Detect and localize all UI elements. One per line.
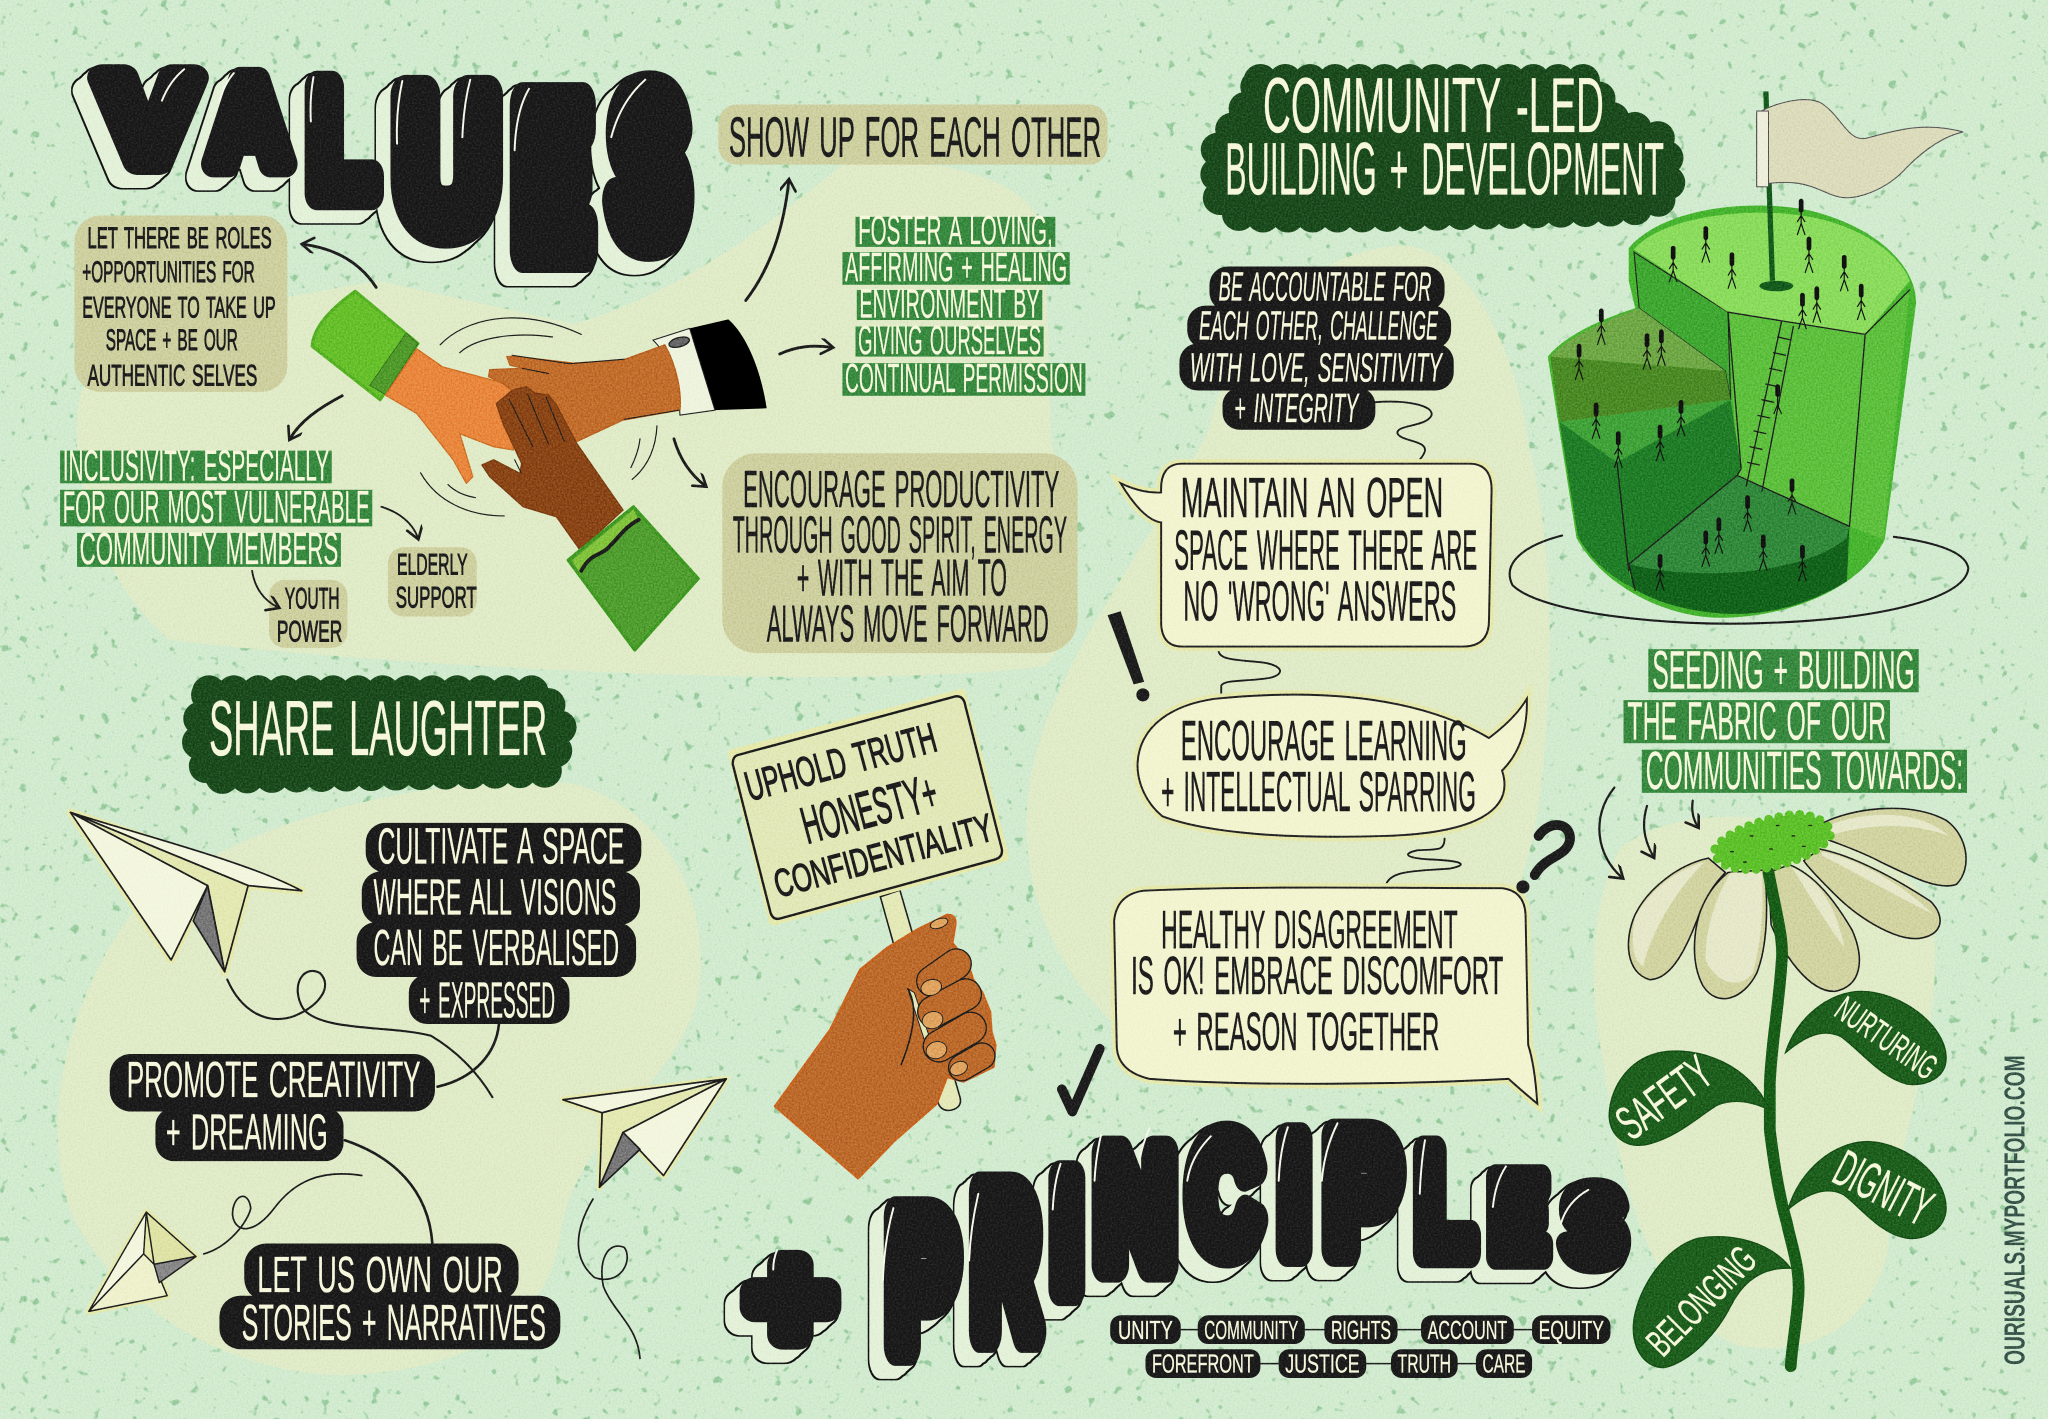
- sign handle: [880, 890, 960, 1110]
- connector lines between pills and plane trails: [204, 971, 640, 1358]
- icon: brown hand: [488, 345, 680, 441]
- title: VALUES: E: [515, 59, 590, 295]
- icon: paper plane top left: [71, 812, 302, 972]
- stem: [1768, 873, 1799, 1366]
- sign with hand: [733, 694, 1004, 1178]
- text: EACH OTHER, CHALLENGE: [1199, 303, 1438, 349]
- icon: fist: [775, 915, 1000, 1178]
- text: SPACE WHERE THERE ARE: [1174, 518, 1477, 581]
- black pills: cultivate a space: [357, 817, 641, 1028]
- black pills: promote creativity: + DREAMING: [166, 1103, 328, 1160]
- icon: light orange hand: [385, 349, 517, 483]
- structure lines: [1617, 290, 1910, 590]
- tags: principles keywords: [1110, 1315, 1610, 1379]
- title: + PRINCIPLES: +: [749, 1222, 832, 1375]
- text: ALWAYS MOVE FORWARD: [767, 595, 1049, 653]
- black pills: let us own our stories: [219, 1243, 560, 1351]
- leaf: nurturing: [1785, 989, 1946, 1087]
- sign board: CONFIDENTIALITY: [769, 807, 998, 906]
- title: VALUES: A: [210, 55, 289, 191]
- tag: elderly support: ELDERLY: [397, 549, 468, 582]
- speech bubble: healthy disagreement: HEALTHY DISAGREEMENT: [1161, 901, 1458, 960]
- text: + INTELLECTUAL SPARRING: [1161, 760, 1476, 823]
- panel: inclusivity: [60, 443, 372, 574]
- upper wall: [1634, 252, 1731, 400]
- title: + PRINCIPLES: I: [1280, 1106, 1308, 1284]
- arrows around hands: [252, 180, 832, 607]
- black pills: let us own our stories: LET US OWN OUR: [257, 1246, 503, 1303]
- text: NO 'WRONG' ANSWERS: [1183, 569, 1456, 632]
- title: + PRINCIPLES: P: [1326, 1102, 1399, 1284]
- title: + PRINCIPLES: R: [973, 1151, 1038, 1373]
- panel: foster a loving environment: FOSTER A LOVING,: [858, 207, 1053, 253]
- panel: let there be roles: LET THERE BE ROLES: [88, 222, 272, 255]
- panel: let there be roles: [74, 216, 287, 392]
- title: + PRINCIPLES: S: [1563, 1168, 1625, 1284]
- panel: inclusivity: INCLUSIVITY: ESPECIALLY: [63, 443, 329, 491]
- panel: let there be roles: SPACE + BE OUR: [106, 324, 238, 357]
- sign board: UPHOLD TRUTH: [740, 714, 941, 810]
- title: VALUES: U: [397, 55, 496, 267]
- speech bubble: be accountable: [1179, 263, 1454, 431]
- tag: elderly support: [388, 547, 477, 617]
- illustration: flower: [1606, 808, 1966, 1368]
- title: + PRINCIPLES: [749, 1102, 1625, 1385]
- leaf: dignity: [1788, 1140, 1946, 1239]
- title: + PRINCIPLES: L: [1417, 1120, 1474, 1283]
- panel: inclusivity: COMMUNITY MEMBERS: [80, 523, 338, 574]
- flag: [1757, 91, 1963, 291]
- squiggle connectors: [1219, 402, 1461, 886]
- text: BE ACCOUNTABLE FOR: [1219, 263, 1432, 309]
- text: IS OK! EMBRACE DISCOMFORT: [1131, 947, 1503, 1006]
- speech bubble: maintain an open space: [1121, 464, 1492, 647]
- panel: foster a loving environment: GIVING OURSELVES: [858, 317, 1041, 363]
- panel: seeding + building: [1624, 641, 1967, 801]
- title: + PRINCIPLES: C: [1189, 1106, 1260, 1284]
- tag: youth power: [269, 580, 347, 648]
- speech bubble: healthy disagreement: + REASON TOGETHER: [1173, 1003, 1439, 1062]
- tag: youth power: POWER: [277, 615, 342, 648]
- speech bubble: maintain an open space: MAINTAIN AN OPEN: [1181, 466, 1443, 529]
- tags: principles keywords: COMMUNITY: [1204, 1315, 1298, 1345]
- leaf: belonging: BELONGING: [1639, 1238, 1765, 1365]
- tags: principles keywords: JUSTICE: [1285, 1349, 1360, 1379]
- leaf: safety: SAFETY: [1606, 1045, 1722, 1150]
- arrows to flower: [1599, 788, 1698, 878]
- ladder: [1746, 321, 1793, 491]
- title: VALUES: [101, 51, 687, 295]
- text: SHOW UP FOR EACH OTHER: [729, 106, 1101, 169]
- hill right body: [1728, 290, 1910, 539]
- background blobs: [58, 162, 1935, 1375]
- leaf: safety: [1606, 1045, 1770, 1150]
- text: CONTINUAL PERMISSION: [845, 355, 1083, 401]
- black pills: let us own our stories: STORIES + NARRATIVES: [242, 1294, 546, 1351]
- text: CAN BE VERBALISED: [374, 919, 619, 976]
- title: VALUES: S: [611, 51, 687, 282]
- panel: let there be roles: +OPPORTUNITIES FOR: [82, 256, 255, 289]
- stick figures: [1575, 201, 1865, 590]
- cloud heading: share laughter: [196, 684, 562, 777]
- tags: principles keywords: FOREFRONT: [1152, 1349, 1254, 1379]
- leaf: dignity: DIGNITY: [1824, 1140, 1942, 1238]
- tags: principles keywords: EQUITY: [1539, 1315, 1604, 1345]
- panel: encourage productivity: + WITH THE AIM TO: [797, 550, 1007, 608]
- panel: let there be roles: EVERYONE TO TAKE UP: [82, 291, 276, 324]
- hill silhouette: [1548, 206, 1916, 618]
- sign board: [733, 694, 1004, 921]
- text: ENCOURAGE PRODUCTIVITY: [743, 461, 1059, 519]
- black pills: promote creativity: [110, 1051, 435, 1161]
- black pills: cultivate a space: CULTIVATE A SPACE: [377, 817, 624, 874]
- icon: paper plane bottom left: [89, 1212, 196, 1311]
- icon: green cuff: [568, 507, 698, 650]
- petal highlights: [1633, 815, 1949, 983]
- speech bubble: encourage learning: ENCOURAGE LEARNING: [1181, 709, 1467, 772]
- icon: question mark: [1516, 825, 1570, 893]
- leaf: belonging: [1633, 1237, 1791, 1368]
- speech bubble: be accountable: + INTEGRITY: [1234, 385, 1360, 431]
- sign board: HONESTY+: [795, 764, 944, 856]
- panel: foster a loving environment: [842, 207, 1085, 401]
- speech bubble: be accountable: WITH LOVE, SENSITIVITY: [1190, 344, 1443, 390]
- tag: youth power: YOUTH: [285, 583, 340, 616]
- step two: [1550, 308, 1725, 371]
- flower centre: [1715, 815, 1831, 869]
- illustration: cylinder hill with flag: [1510, 91, 1968, 624]
- credit: website: OURISUALS.MYPORTFOLIO.COM: [1999, 1055, 2031, 1365]
- tags: principles keywords: ACCOUNT: [1428, 1315, 1507, 1345]
- cloud heading: community-led building + development: [1217, 61, 1669, 216]
- tag: elderly support: SUPPORT: [396, 581, 477, 614]
- icon: check mark: [1062, 1049, 1100, 1112]
- title: + PRINCIPLES: I: [1053, 1144, 1081, 1323]
- text: FOR OUR MOST VULNERABLE: [63, 481, 370, 532]
- bottom wedge: [1629, 475, 1849, 614]
- icon: black sleeve: [690, 319, 767, 410]
- icon: exclamation mark: [1108, 611, 1149, 701]
- text: SHARE LAUGHTER: [209, 684, 547, 772]
- icon: dark hand: [482, 387, 623, 550]
- speech bubble: encourage learning: [1138, 695, 1527, 837]
- panel: let there be roles: AUTHENTIC SELVES: [88, 359, 257, 392]
- tags: principles keywords: RIGHTS: [1331, 1315, 1391, 1345]
- text: THROUGH GOOD SPIRIT, ENERGY: [733, 507, 1067, 565]
- motion lines: [421, 318, 657, 516]
- ground ellipse: [1510, 536, 1968, 624]
- tags: principles keywords: TRUTH: [1398, 1349, 1451, 1379]
- hill top surface: [1634, 213, 1910, 334]
- icon: paper plane middle: [563, 1079, 726, 1187]
- icon: white cuff: [653, 328, 715, 415]
- title: VALUES: V: [101, 51, 195, 188]
- panel: encourage productivity: [722, 453, 1078, 653]
- speech bubble: healthy disagreement: [1114, 888, 1537, 1104]
- title: + PRINCIPLES: N: [1096, 1119, 1174, 1300]
- panel: foster a loving environment: AFFIRMING + HEALING: [845, 244, 1067, 290]
- icon: green sleeve left: [312, 291, 418, 400]
- heading: show up for each other: [718, 105, 1108, 169]
- title: + PRINCIPLES: E: [1490, 1151, 1547, 1282]
- tags: principles keywords: CARE: [1482, 1349, 1526, 1379]
- black pills: promote creativity: PROMOTE CREATIVITY: [127, 1051, 421, 1108]
- tags: principles keywords: UNITY: [1118, 1315, 1173, 1345]
- title: + PRINCIPLES: P: [888, 1177, 956, 1385]
- leaf: nurturing: NURTURING: [1828, 989, 1944, 1087]
- illustration: three stacked hands: [312, 291, 767, 650]
- panel: foster a loving environment: ENVIRONMENT BY: [859, 280, 1040, 326]
- title: VALUES: L: [309, 56, 375, 227]
- black pills: cultivate a space: + EXPRESSED: [419, 971, 555, 1028]
- cloud heading: community-led building + development: COMMUNITY -LED: [1263, 61, 1604, 149]
- petals: [1628, 808, 1966, 999]
- black pills: cultivate a space: WHERE ALL VISIONS: [374, 868, 616, 925]
